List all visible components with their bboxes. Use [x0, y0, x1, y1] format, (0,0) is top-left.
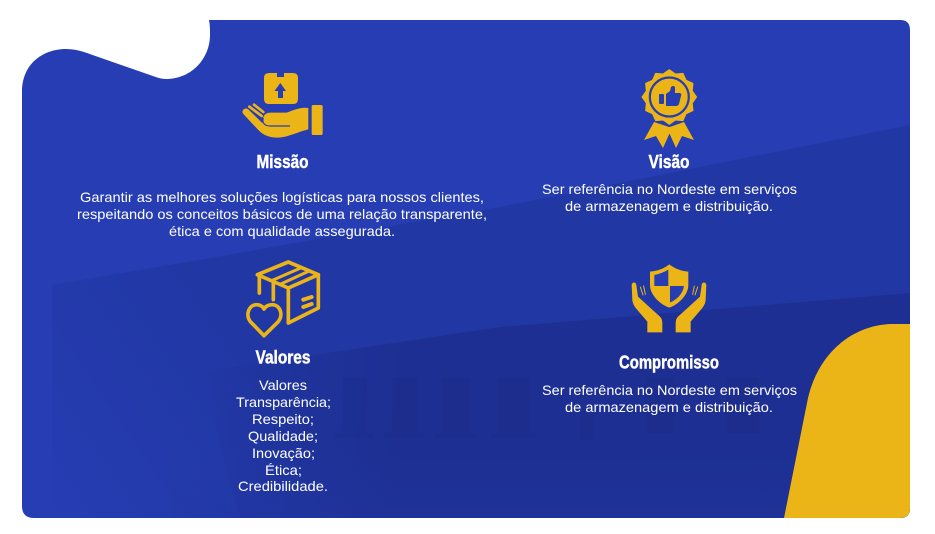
text: Compromisso description: [542, 383, 797, 415]
text: Valores list: Respeito;: [252, 412, 314, 427]
heading: Visão: Visão: [648, 152, 690, 172]
text: Visão description: [542, 182, 797, 214]
text: Valores list: Ética;: [265, 463, 302, 478]
text: Valores list: Qualidade;: [248, 429, 318, 444]
text: Valores list: Transparência;: [236, 395, 331, 410]
heading: Compromisso: Compromisso: [619, 352, 719, 372]
icon: hand holding box: [243, 73, 323, 138]
text: Valores list: Valores: [259, 378, 307, 393]
text: Missão description: ética e com qualidade assegurada.: [169, 224, 395, 239]
text: Compromisso description: Ser referência no Nordeste em serviços: [542, 383, 797, 398]
icon: box with heart: [248, 262, 318, 336]
text: Missão description: Garantir as melhores soluções logísticas para nossos clientes,: [80, 190, 484, 205]
panel: yellow corner shape: [784, 324, 910, 518]
text: Missão description: [77, 190, 487, 239]
heading: Valores: Valores: [256, 348, 310, 368]
text: Missão description: respeitando os conceitos básicos de uma relação transparente,: [77, 207, 487, 222]
text: Valores list: [236, 378, 331, 494]
heading: Missão: Missão: [256, 152, 308, 172]
text: Compromisso description: de armazenagem e distribuição.: [565, 400, 773, 415]
text: Valores list: Credibilidade.: [238, 479, 328, 494]
text: Visão description: de armazenagem e distribuição.: [565, 199, 773, 214]
icon: hands protecting shield: [632, 264, 706, 332]
text: Valores list: Inovação;: [252, 446, 315, 461]
text: Visão description: Ser referência no Nordeste em serviços: [542, 182, 797, 197]
icon: award badge with thumbs up: [642, 70, 696, 148]
